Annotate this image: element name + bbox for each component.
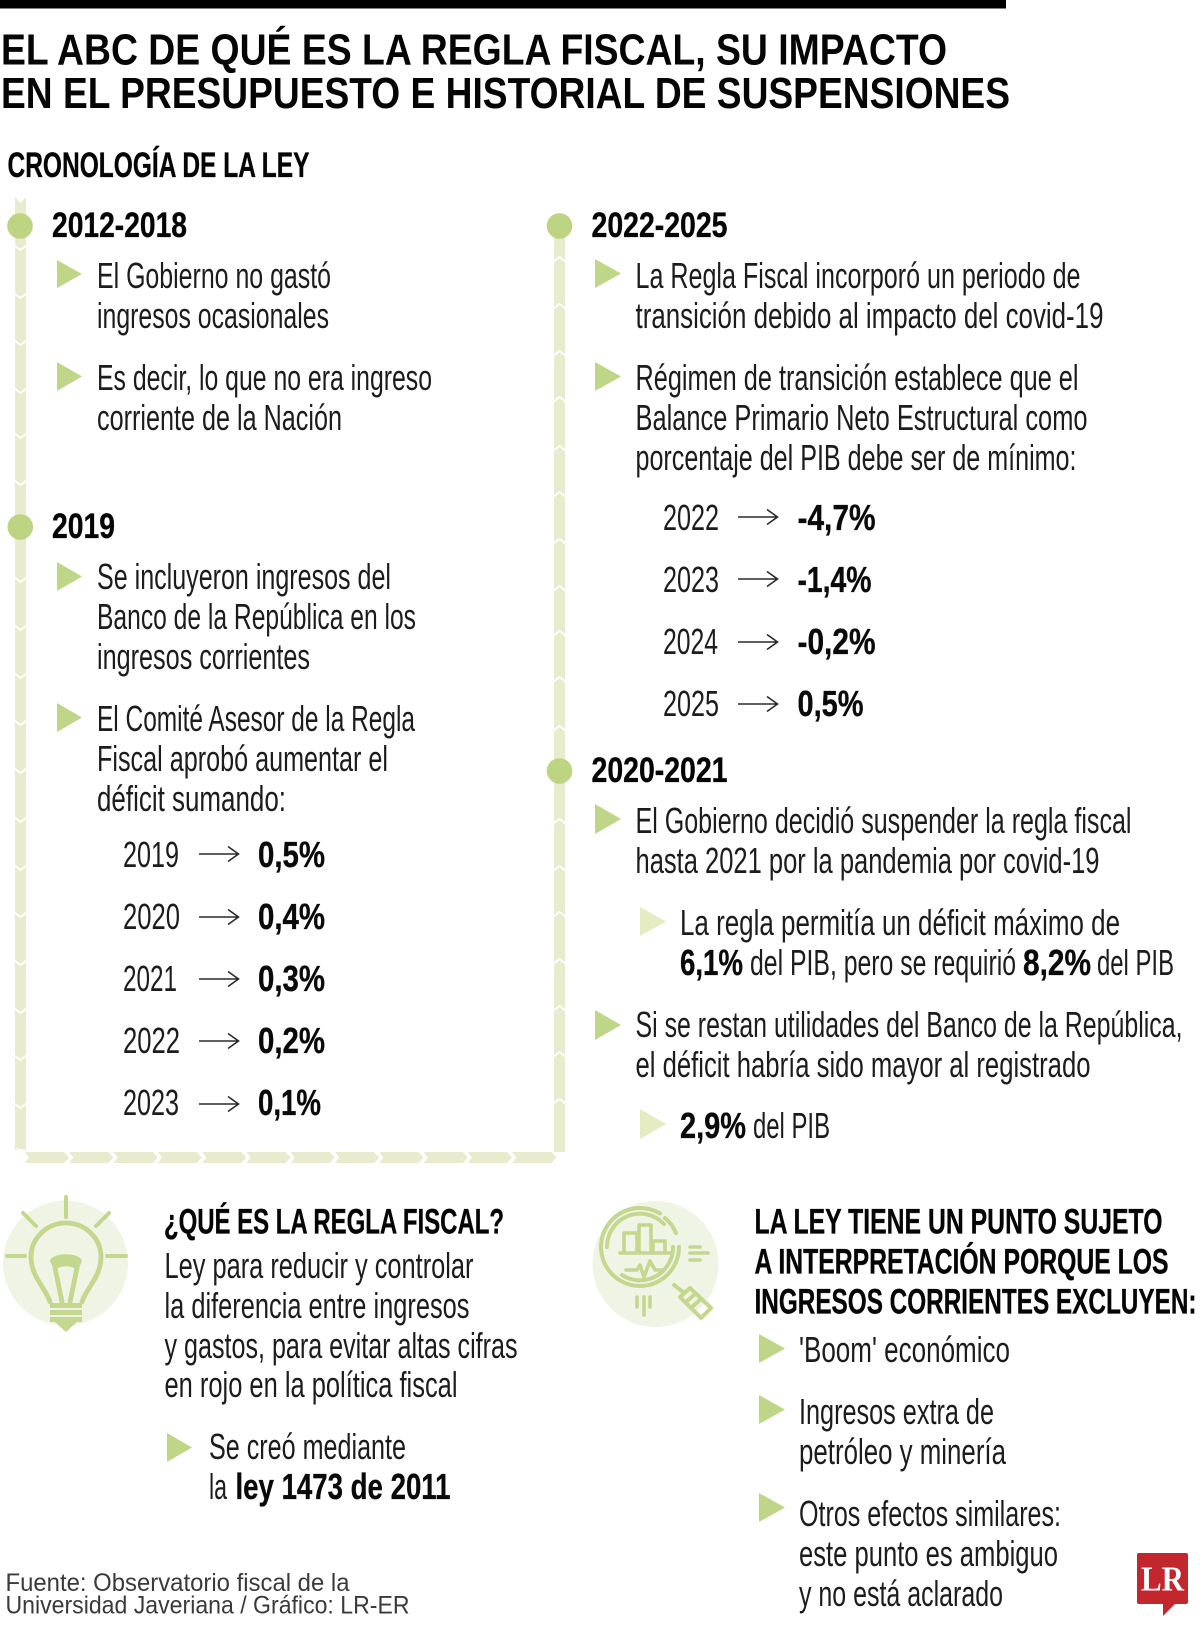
bullet item [57, 357, 432, 438]
bullet item: El Comité Asesor de la Regla [97, 698, 416, 739]
title: EL ABC DE QUÉ ES LA REGLA FISCAL, SU IMPACTO [1, 24, 947, 74]
table: deficit additions by year [123, 834, 325, 1123]
panel: qué es la regla fiscal [164, 1202, 518, 1507]
bullet item: la [209, 1466, 228, 1507]
table: deficit additions by year: 2023 [123, 1082, 179, 1123]
bullet item [167, 1426, 450, 1507]
bullet item [57, 698, 416, 819]
description text: Ley para reducir y controlar [164, 1245, 474, 1286]
table: minimum balance by year: -0,2% [798, 621, 876, 662]
bullet item: ingresos ocasionales [97, 295, 329, 336]
timeline dot [7, 213, 33, 239]
bullet item [595, 800, 1132, 881]
icon: magnifier over chart [592, 1201, 718, 1327]
bullet item [57, 255, 331, 336]
period heading: 2012-2018 [52, 206, 187, 245]
heading: ¿QUÉ ES LA REGLA FISCAL? [164, 1202, 504, 1242]
bullet item: El Gobierno no gastó [97, 255, 331, 296]
timeline dot [7, 514, 33, 540]
table: minimum balance by year: 2023 [663, 559, 719, 600]
bullet item: Fiscal aprobó aumentar el [97, 738, 388, 779]
table: minimum balance by year: -1,4% [798, 559, 872, 600]
bullet item [595, 357, 1088, 478]
logo: LR [1137, 1553, 1188, 1616]
period heading: 2020-2021 [592, 751, 728, 790]
bullet item [759, 1391, 1007, 1472]
bullet item: este punto es ambiguo [799, 1533, 1058, 1574]
source note: Universidad Javeriana / Gráfico: LR-ER [6, 1592, 410, 1620]
table: minimum balance by year: 0,5% [798, 683, 864, 724]
bullet item: 'Boom' económico [799, 1329, 1010, 1370]
period heading: 2022-2025 [592, 206, 728, 245]
bullet item: déficit sumando: [97, 778, 286, 819]
period heading: 2019 [52, 507, 115, 546]
bullet item: Otros efectos similares: [799, 1493, 1061, 1534]
section heading: cronología: CRONOLOGÍA DE LA LEY [8, 145, 310, 185]
bullet item [759, 1329, 1010, 1370]
sub-bullet item: 8,2% [1023, 942, 1091, 983]
table: deficit additions by year: 2019 [123, 834, 179, 875]
sub-bullet item [640, 1105, 830, 1146]
panel: 2020-2021 [547, 751, 1182, 1146]
description text: en rojo en la política fiscal [164, 1364, 458, 1405]
sub-bullet item [640, 902, 1174, 983]
table: minimum balance by year: 2024 [663, 621, 718, 662]
bullet item: Ingresos extra de [799, 1391, 994, 1432]
table: minimum balance by year: -4,7% [798, 497, 876, 538]
bullet item [595, 1004, 1182, 1085]
timeline dot [547, 213, 572, 239]
bullet item: petróleo y minería [799, 1431, 1007, 1472]
table: deficit additions by year: 0,3% [258, 958, 325, 999]
bullet item: ingresos corrientes [97, 636, 310, 677]
table: deficit additions by year: 2021 [123, 958, 177, 999]
top black bar [0, 0, 1006, 8]
title: EN EL PRESUPUESTO E HISTORIAL DE SUSPENSIONES [1, 70, 1010, 118]
heading [754, 1202, 1196, 1322]
table: deficit additions by year: 0,4% [258, 896, 325, 937]
table: deficit additions by year: 2020 [123, 896, 180, 937]
sub-bullet item: 6,1% [680, 942, 743, 983]
sub-bullet item: 2,9% [680, 1105, 746, 1146]
sub-bullet item: del PIB [753, 1105, 830, 1146]
table: deficit additions by year: 0,2% [258, 1020, 325, 1061]
panel: 2019 [7, 507, 416, 1123]
title [1, 24, 1010, 118]
table: deficit additions by year: 0,1% [258, 1082, 321, 1123]
panel: ley sujeta a interpretación [754, 1202, 1196, 1614]
table: minimum balance by year: 2022 [663, 497, 719, 538]
bullet item: Se creó mediante [209, 1426, 406, 1467]
source note [6, 1569, 410, 1620]
bullet item [57, 556, 416, 677]
bullet item: ley 1473 de 2011 [236, 1466, 450, 1507]
timeline frame [14, 197, 566, 1163]
bullet item: corriente de la Nación [97, 397, 342, 438]
sub-bullet item: del PIB, pero se requirió [750, 942, 1016, 983]
table: deficit additions by year: 2022 [123, 1020, 180, 1061]
bullet item: Banco de la República en los [97, 596, 416, 637]
table: minimum balance by year: 2025 [663, 683, 719, 724]
bullet item: y no está aclarado [799, 1573, 1003, 1614]
bullet item: Se incluyeron ingresos del [97, 556, 391, 597]
description text [164, 1245, 518, 1405]
bullet item [595, 255, 1104, 336]
table: deficit additions by year: 0,5% [258, 834, 325, 875]
logo: LR: LR [1141, 1560, 1185, 1598]
description text: la diferencia entre ingresos [164, 1285, 470, 1326]
source note: Fuente: Observatorio fiscal de la [6, 1569, 350, 1597]
panel: 2022-2025 [547, 206, 1104, 724]
timeline dot [547, 758, 572, 784]
panel: 2012-2018 [7, 206, 432, 438]
description text: y gastos, para evitar altas cifras [164, 1325, 518, 1366]
bullet item [759, 1493, 1061, 1614]
table: minimum balance by year [663, 497, 876, 724]
icon: light bulb [3, 1197, 128, 1332]
bullet item: Es decir, lo que no era ingreso [97, 357, 432, 398]
